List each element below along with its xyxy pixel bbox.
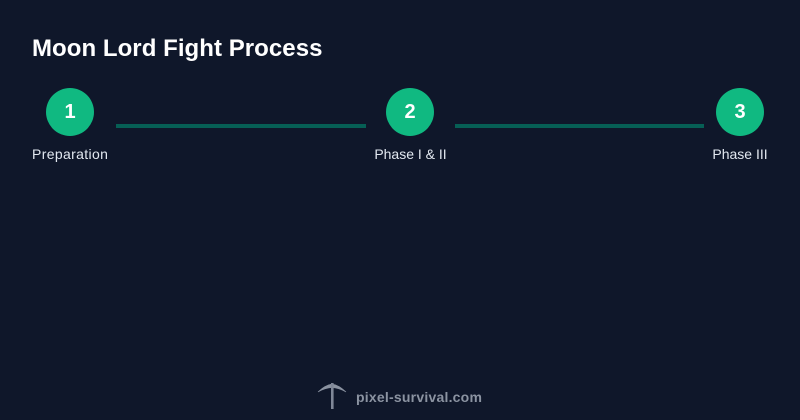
step 2 circle: 2 [404, 101, 416, 123]
connector 1 to 2 [116, 124, 366, 128]
brand text: pixel-survival.com [356, 389, 482, 405]
step 3 label: Phase III [712, 146, 768, 162]
step 1 label: Preparation [32, 146, 108, 162]
icon: pickaxe [318, 383, 346, 409]
step 1 circle: 1 [64, 101, 76, 123]
title: Moon Lord Fight Process [32, 35, 322, 62]
step 2 label: Phase I & II [374, 146, 447, 162]
connector 2 to 3 [455, 124, 704, 128]
step 1 circle [46, 88, 94, 136]
step 3 circle: 3 [734, 101, 746, 123]
step 2 circle [386, 88, 434, 136]
step 3 circle [716, 88, 764, 136]
